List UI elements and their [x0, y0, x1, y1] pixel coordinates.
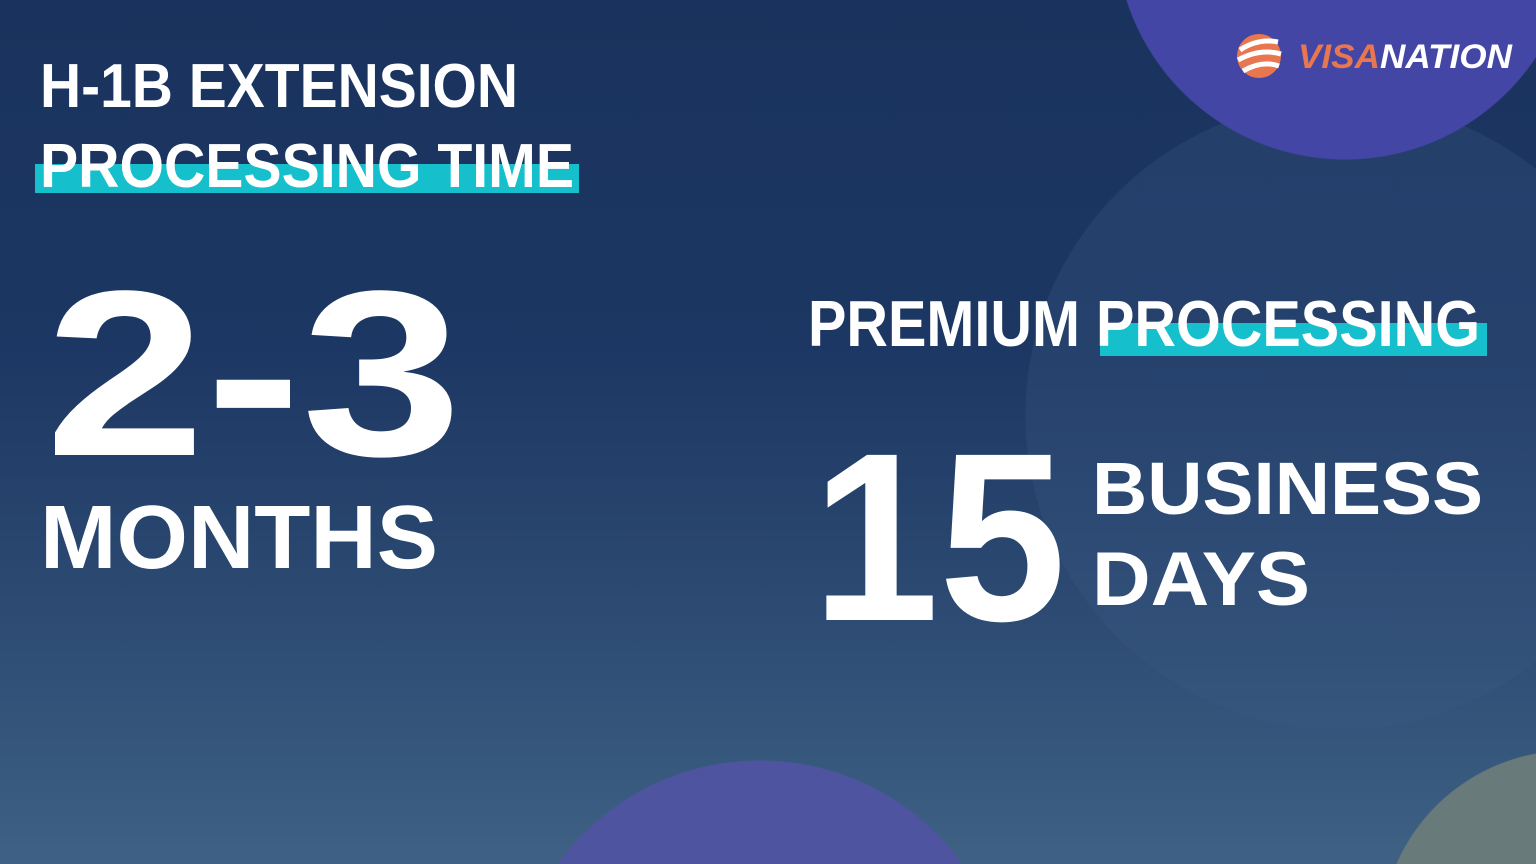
logo text: VISANATION: [1298, 38, 1513, 76]
stat: regular processing: [40, 242, 462, 588]
stat: premium processing: DAYS: [1092, 537, 1310, 622]
title: PROCESSING TIME: [40, 132, 574, 201]
title: H-1B EXTENSION: [40, 52, 518, 121]
stat: regular processing: 2-3: [45, 242, 462, 506]
logo: [1237, 34, 1513, 78]
title highlight bar: [35, 164, 579, 193]
stat: premium processing: [812, 403, 1483, 671]
stat: premium processing: 15: [812, 403, 1066, 671]
stat: regular processing: MONTHS: [40, 488, 438, 588]
title: [35, 52, 579, 201]
logo icon: [1237, 34, 1281, 78]
stat: premium processing: BUSINESS: [1092, 447, 1483, 530]
premium highlight bar: [1100, 323, 1487, 356]
